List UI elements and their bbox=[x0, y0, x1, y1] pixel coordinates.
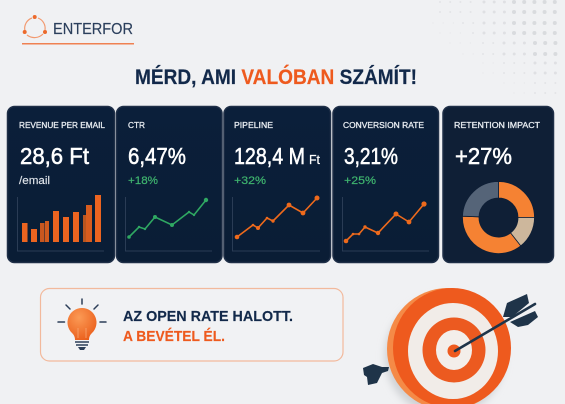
value: +27% bbox=[455, 143, 512, 169]
icon: target with arrow bbox=[363, 288, 538, 404]
callout: A BEVÉTEL ÉL. bbox=[123, 328, 225, 345]
title: MÉRD, AMI VALÓBAN SZÁMÍT! bbox=[135, 65, 417, 89]
label: CTR bbox=[128, 120, 145, 130]
label: CONVERSION RATE bbox=[343, 120, 424, 130]
arrow bbox=[455, 294, 538, 351]
line chart bbox=[126, 197, 212, 251]
change: +25% bbox=[344, 175, 376, 187]
label: RETENTION IMPACT bbox=[454, 120, 540, 130]
panel: retention impact bbox=[443, 106, 554, 262]
logo icon bbox=[23, 15, 47, 38]
value: 28,6 Ft bbox=[20, 143, 89, 169]
value: 3,21% bbox=[344, 143, 398, 169]
arrow tail bbox=[363, 364, 389, 385]
callout text: AZ OPEN RATE HALOTT. bbox=[123, 308, 293, 325]
value: 128,4 M bbox=[234, 143, 305, 169]
label: REVENUE PER EMAIL bbox=[19, 120, 105, 130]
line chart bbox=[232, 196, 320, 251]
panel: pipeline bbox=[224, 106, 330, 262]
panel: revenue per email bbox=[8, 106, 114, 262]
icon: light bulb bbox=[58, 299, 106, 350]
panel: CTR bbox=[116, 106, 222, 262]
value unit: Ft bbox=[309, 152, 320, 167]
change: +32% bbox=[234, 175, 266, 187]
change: +18% bbox=[128, 175, 158, 187]
callout bbox=[40, 288, 343, 361]
donut chart bbox=[462, 181, 535, 254]
logo wordmark: ENTERFOR bbox=[53, 21, 133, 38]
unit: /email bbox=[19, 175, 50, 187]
panel: conversion rate bbox=[333, 106, 438, 262]
label: PIPELINE bbox=[234, 120, 273, 130]
bar chart bbox=[18, 195, 104, 251]
logo bbox=[22, 15, 134, 44]
value: 6,47% bbox=[128, 143, 186, 169]
line chart bbox=[342, 197, 429, 251]
